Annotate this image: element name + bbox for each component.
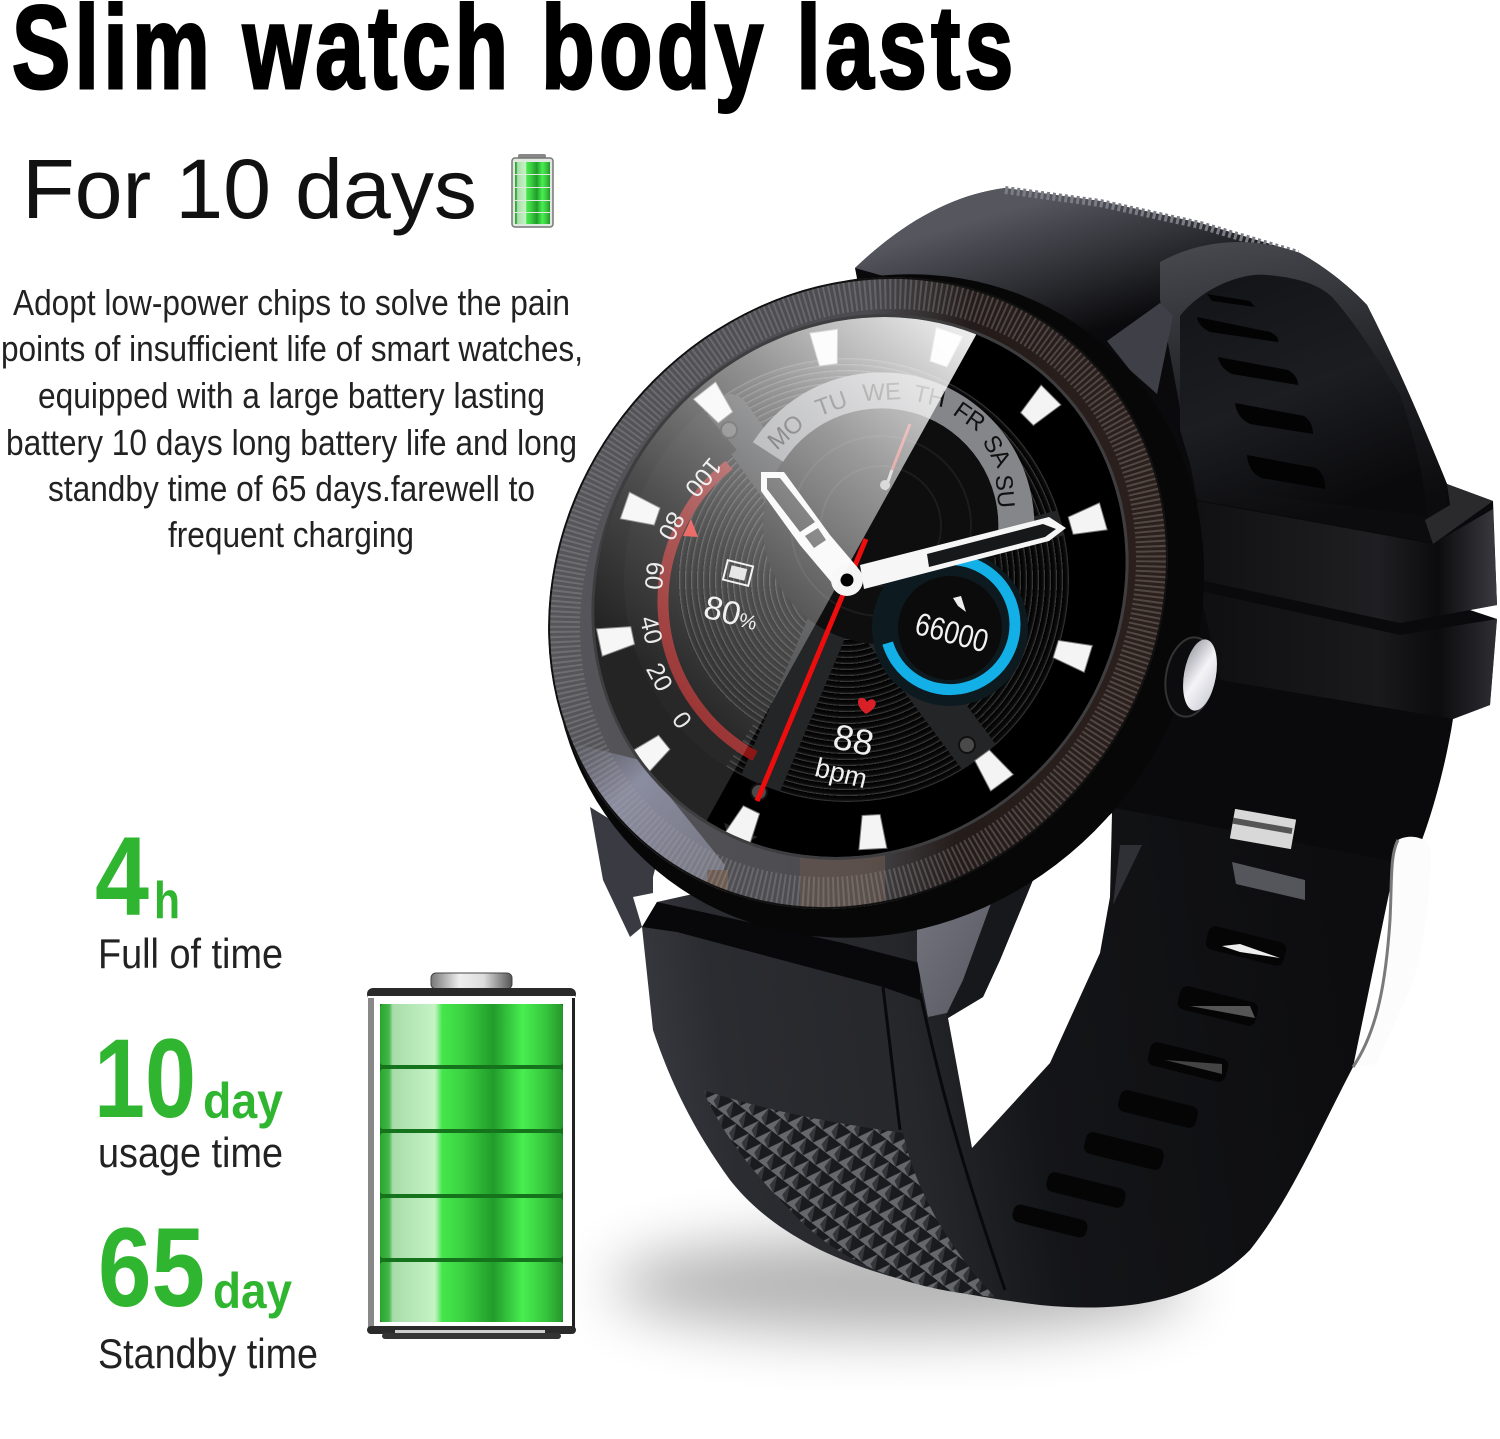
minute hand xyxy=(860,517,1066,589)
glass reflection xyxy=(594,317,976,820)
gauge scale: 100 xyxy=(679,452,727,502)
stat: 4h full of time xyxy=(95,814,283,977)
smartwatch xyxy=(548,186,1497,1308)
buckle loops xyxy=(1197,484,1497,719)
ground shadow xyxy=(610,1237,1190,1333)
description paragraph: Adopt low-power chips to solve the pain xyxy=(13,282,570,323)
icon: small green battery xyxy=(512,154,553,227)
icon: large green battery xyxy=(367,973,576,1339)
stat: 4h full of time: 4 xyxy=(95,814,149,939)
stat: 10 day usage time: 10 xyxy=(94,1016,196,1141)
watch lugs xyxy=(590,303,1173,1018)
description paragraph: battery 10 days long battery life and long xyxy=(6,422,577,463)
strap tongue xyxy=(1180,275,1427,516)
heart rate readout: bpm xyxy=(812,752,870,794)
strap fold xyxy=(642,902,920,1000)
upper strap xyxy=(855,188,1497,1067)
battery gauge arc xyxy=(663,465,755,756)
stat: 10 day usage time: usage time xyxy=(98,1129,283,1176)
step count ring: 66000 xyxy=(911,605,992,659)
weekday dial: MO xyxy=(763,409,809,455)
description paragraph: standby time of 65 days.farewell to xyxy=(48,468,535,509)
case rim xyxy=(417,141,1339,1071)
weekday dial: SA xyxy=(977,431,1016,472)
description paragraph xyxy=(1,282,583,555)
step count ring xyxy=(872,550,1028,706)
weekday dial xyxy=(763,378,1019,644)
lower strap xyxy=(642,800,1398,1308)
concentric dial rings xyxy=(679,358,1069,802)
gauge scale: 40 xyxy=(634,613,668,647)
stat: 4h full of time: h xyxy=(154,872,180,930)
weekday dial: TU xyxy=(812,386,851,422)
description paragraph: points of insufficient life of smart watches, xyxy=(1,328,583,369)
battery readout: 80% xyxy=(700,588,762,637)
weekday dial: TH xyxy=(911,380,948,413)
lower strap holes xyxy=(1011,925,1288,1239)
stat: 4h full of time: Full of time xyxy=(98,930,283,977)
bezel xyxy=(548,277,1168,909)
stat: 65 day standby time xyxy=(98,1205,318,1377)
stat: 65 day standby time: day xyxy=(213,1263,292,1319)
gauge scale: 0 xyxy=(666,707,697,734)
description paragraph: frequent charging xyxy=(168,514,414,555)
hand pivot xyxy=(831,568,863,596)
gauge scale: 20 xyxy=(640,658,678,696)
gauge scale: 60 xyxy=(639,561,669,591)
second hand xyxy=(757,539,866,801)
gauge scale: 80 xyxy=(652,507,690,545)
knurled texture xyxy=(703,1090,995,1297)
stat: 65 day standby time: Standby time xyxy=(98,1330,318,1377)
gauge scale xyxy=(642,458,720,728)
stat: 10 day usage time xyxy=(94,1016,283,1176)
weekday dial: FR xyxy=(948,397,990,437)
upper strap holes xyxy=(1197,294,1325,489)
heart rate readout xyxy=(815,698,876,788)
outer black ring xyxy=(600,333,1094,827)
buckle pin xyxy=(1230,809,1305,900)
weekday dial: WE xyxy=(862,378,902,407)
hour hand xyxy=(761,472,858,590)
heart rate readout: 88 xyxy=(830,716,877,764)
strap gap xyxy=(948,813,1112,1148)
weekday dial: SU xyxy=(990,474,1019,509)
dial spokes xyxy=(729,415,1090,820)
stat: 10 day usage time: day xyxy=(203,1073,283,1129)
strap shell xyxy=(1160,242,1447,545)
description paragraph: equipped with a large battery lasting xyxy=(38,375,545,416)
buckle keeper xyxy=(1353,837,1431,1067)
hour markers xyxy=(596,327,1107,850)
crown button xyxy=(1159,633,1222,721)
subtitle: For 10 days xyxy=(22,142,477,236)
dial screws xyxy=(721,422,975,800)
stat: 65 day standby time: 65 xyxy=(98,1205,205,1330)
battery readout xyxy=(704,559,756,630)
gauge black band xyxy=(650,430,740,745)
watch face xyxy=(594,317,1126,857)
bezel highlight xyxy=(575,745,725,889)
